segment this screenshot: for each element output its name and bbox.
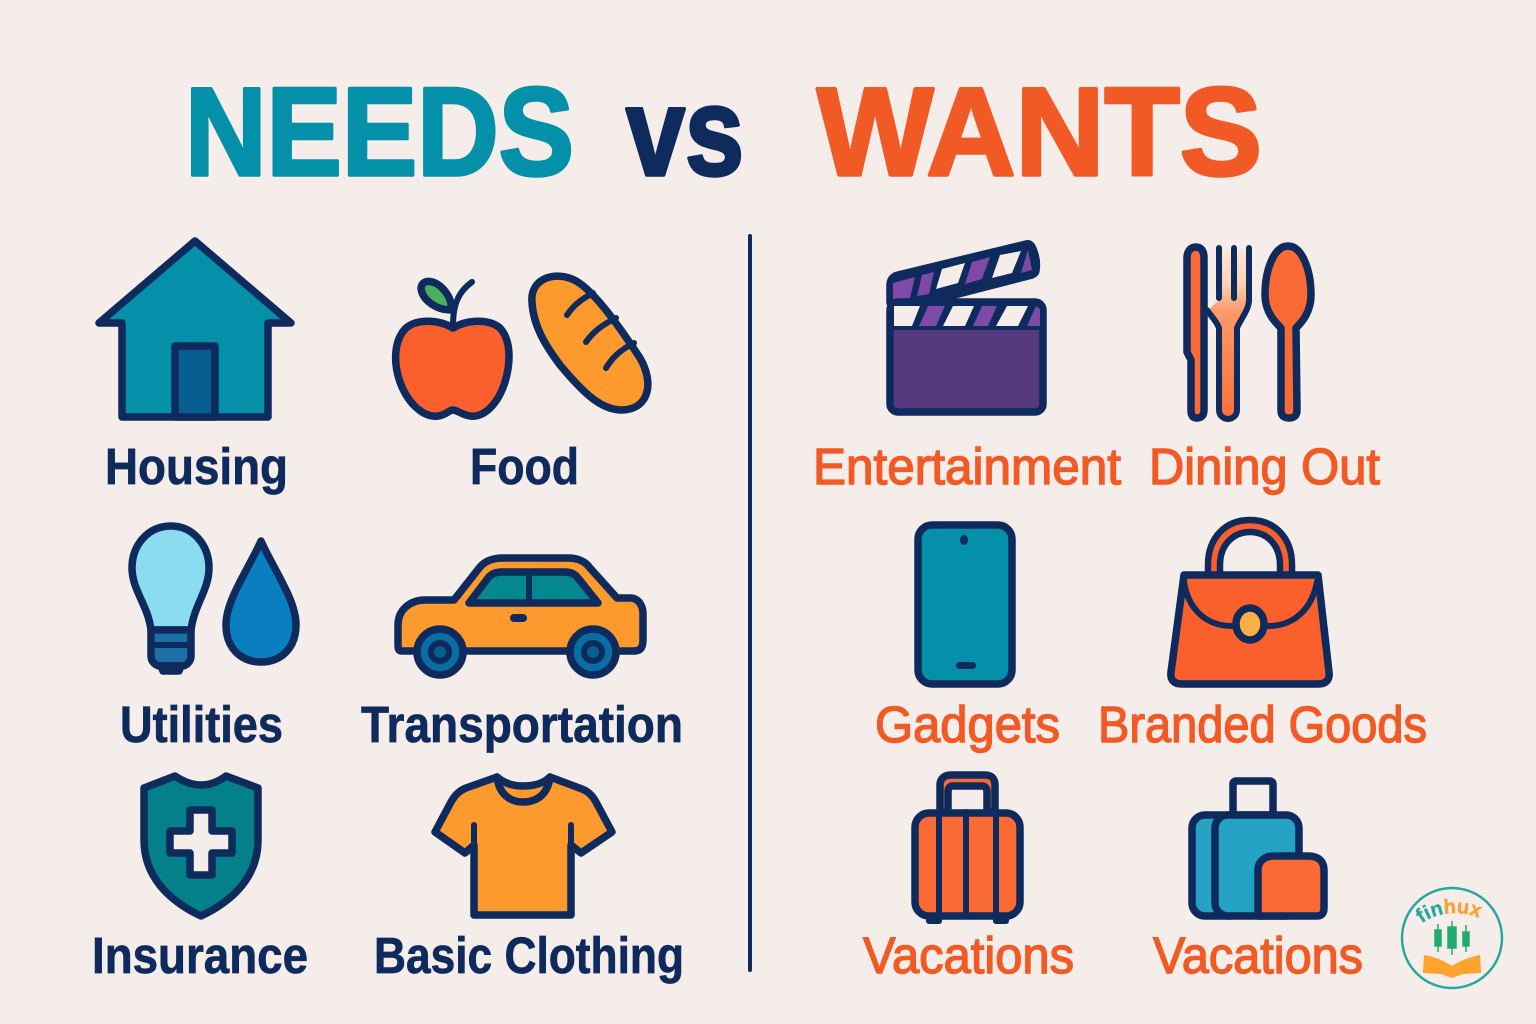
icon: t-shirt — [435, 777, 612, 915]
title word: vs: vs — [626, 63, 744, 202]
label: Basic Clothing: Basic Clothing — [374, 927, 684, 984]
center divider — [748, 236, 752, 970]
icon: orange suitcase — [915, 775, 1020, 924]
icon: house — [99, 241, 291, 417]
title word: WANTS: WANTS — [817, 63, 1262, 202]
icon: apple and bread — [396, 276, 648, 416]
icon: light bulb and water drop — [132, 526, 296, 671]
logo candlesticks — [1435, 921, 1469, 955]
logo: finhux badge — [1400, 886, 1504, 990]
label: Vacations (second): Vacations — [1153, 927, 1363, 984]
icon: film clapperboard — [890, 244, 1043, 412]
label: Branded Goods: Branded Goods — [1098, 696, 1427, 753]
label: Transportation: Transportation — [361, 696, 683, 753]
label: Utilities: Utilities — [120, 696, 283, 753]
title — [185, 63, 1262, 202]
icon: blue luggage set — [1192, 781, 1324, 916]
logo open book — [1423, 955, 1481, 978]
icon: handbag — [1171, 520, 1329, 684]
icon: smartphone — [918, 525, 1012, 684]
label: Dining Out: Dining Out — [1149, 438, 1380, 495]
label: Housing: Housing — [105, 438, 288, 495]
title word: NEEDS: NEEDS — [185, 63, 574, 202]
icon: knife, fork and spoon — [1187, 246, 1311, 419]
icon: car — [398, 558, 643, 675]
label: Gadgets: Gadgets — [875, 696, 1060, 753]
label: Food: Food — [470, 438, 579, 495]
logo wordmark: finhux — [1416, 898, 1482, 922]
panel: needs — [92, 241, 684, 984]
icon: insurance shield — [144, 776, 258, 916]
panel: wants — [813, 244, 1427, 984]
label: Insurance: Insurance — [92, 927, 308, 984]
label: Entertainment: Entertainment — [813, 438, 1121, 495]
label: Vacations (first): Vacations — [863, 927, 1074, 984]
